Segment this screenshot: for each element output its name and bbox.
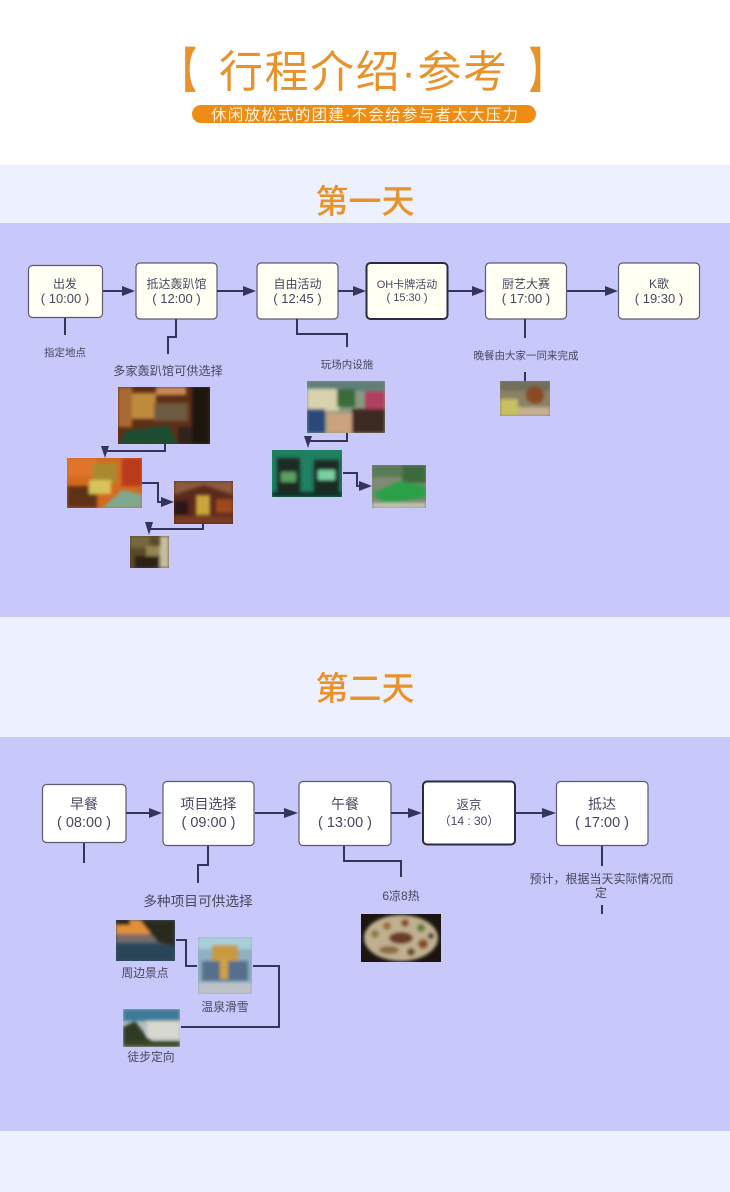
arrow <box>255 808 298 818</box>
note: dinner <box>474 319 579 381</box>
step: karaoke: ( 19:30 ) <box>635 291 683 306</box>
step: return to Beijing: （14 : 30） <box>439 814 499 828</box>
note: activity options <box>143 846 253 909</box>
step: lunch: ( 13:00 ) <box>318 815 372 831</box>
arrow <box>103 286 135 296</box>
note: venue facilities <box>297 319 374 371</box>
note: party halls: 多家轰趴馆可供选择 <box>113 363 223 378</box>
step: return to Beijing <box>423 782 515 844</box>
photo: arcade room <box>307 381 385 433</box>
step: free time: 自由活动 <box>273 277 322 291</box>
step: cooking contest: 厨艺大赛 <box>502 276 550 291</box>
step: arrive <box>556 782 648 846</box>
photo: hiking <box>123 1009 180 1064</box>
note: dinner: 晚餐由大家一同来完成 <box>474 349 579 362</box>
arrow <box>448 286 485 296</box>
connector <box>181 966 279 1027</box>
panel: day one <box>0 223 730 617</box>
note: meeting place: 指定地点 <box>44 346 86 359</box>
step: depart: 出发 <box>53 276 77 291</box>
step: breakfast <box>42 784 126 842</box>
connector <box>176 940 197 966</box>
title: 【 <box>167 46 196 98</box>
photo: scenic spot <box>116 920 175 980</box>
step: arrive: ( 17:00 ) <box>575 815 629 831</box>
title: 行程介绍·参考 <box>219 48 507 97</box>
photo: arcade machines <box>272 450 342 497</box>
step: choose activity: 项目选择 <box>180 796 236 812</box>
step: arrive: 抵达 <box>588 796 616 812</box>
arrow <box>391 808 422 818</box>
title: 】 <box>530 46 559 98</box>
step: choose activity <box>163 782 254 846</box>
photo: banquet table <box>361 914 441 962</box>
step: OH cards: OH卡牌活动 <box>377 277 437 291</box>
step: OH cards: ( 15:30 ) <box>387 292 427 304</box>
arrow <box>304 433 347 448</box>
label: 周边景点 <box>121 966 169 980</box>
panel: day two <box>0 737 730 1131</box>
photo: party hall three <box>174 481 233 524</box>
connector: breakfast <box>83 843 85 863</box>
photo: hot spring ski <box>198 937 252 1014</box>
photo: party hall four <box>130 536 169 568</box>
photo: party hall two <box>67 458 142 508</box>
step: cooking contest: ( 17:00 ) <box>502 291 550 306</box>
subtitle pill: 休闲放松式的团建·不会给参与者太大压力 <box>211 106 518 124</box>
heading: day two: 第二天 <box>316 670 414 707</box>
step: free time <box>257 263 338 319</box>
step: breakfast: 早餐 <box>70 796 98 812</box>
step: arrive party hall: 抵达轰趴馆 <box>146 276 207 291</box>
note: venue facilities: 玩场内设施 <box>321 358 374 371</box>
step: lunch <box>299 782 391 846</box>
arrow <box>101 444 165 458</box>
arrow <box>126 808 162 818</box>
heading: day one: 第一天 <box>316 183 414 220</box>
arrow <box>567 286 618 296</box>
step: arrive party hall <box>136 263 217 319</box>
note: six cold eight hot <box>344 846 420 903</box>
note: six cold eight hot: 6凉8热 <box>382 888 420 903</box>
arrow <box>145 522 203 535</box>
note: arrival estimate: 定 <box>595 885 607 900</box>
note: activity options: 多种项目可供选择 <box>143 893 253 909</box>
step: breakfast: ( 08:00 ) <box>57 815 111 831</box>
arrow <box>142 483 174 507</box>
title <box>167 46 559 98</box>
step: choose activity: ( 09:00 ) <box>182 815 236 831</box>
note: meeting place <box>44 318 86 359</box>
step: karaoke <box>618 263 700 319</box>
step: return to Beijing: 返京 <box>456 798 482 812</box>
step: cooking contest <box>486 263 566 319</box>
note: arrival estimate <box>529 846 674 914</box>
step: depart: ( 10:00 ) <box>41 291 89 306</box>
arrow <box>217 286 256 296</box>
step: OH cards <box>366 263 448 319</box>
arrow <box>343 473 372 491</box>
step: free time: ( 12:45 ) <box>273 291 322 306</box>
step: lunch: 午餐 <box>331 796 359 812</box>
step: arrive party hall: ( 12:00 ) <box>152 291 201 306</box>
photo: party hall one <box>118 387 210 444</box>
note: arrival estimate: 预计，根据当天实际情况而 <box>529 871 674 886</box>
photo: pool table <box>372 465 426 508</box>
photo: dinner dish <box>500 381 550 416</box>
arrow <box>338 286 366 296</box>
note: party halls <box>113 319 223 378</box>
arrow <box>515 808 556 818</box>
step: depart <box>28 266 102 318</box>
label: 温泉滑雪 <box>201 1000 249 1014</box>
label: 徒步定向 <box>127 1050 175 1064</box>
step: karaoke: K歌 <box>649 276 669 291</box>
